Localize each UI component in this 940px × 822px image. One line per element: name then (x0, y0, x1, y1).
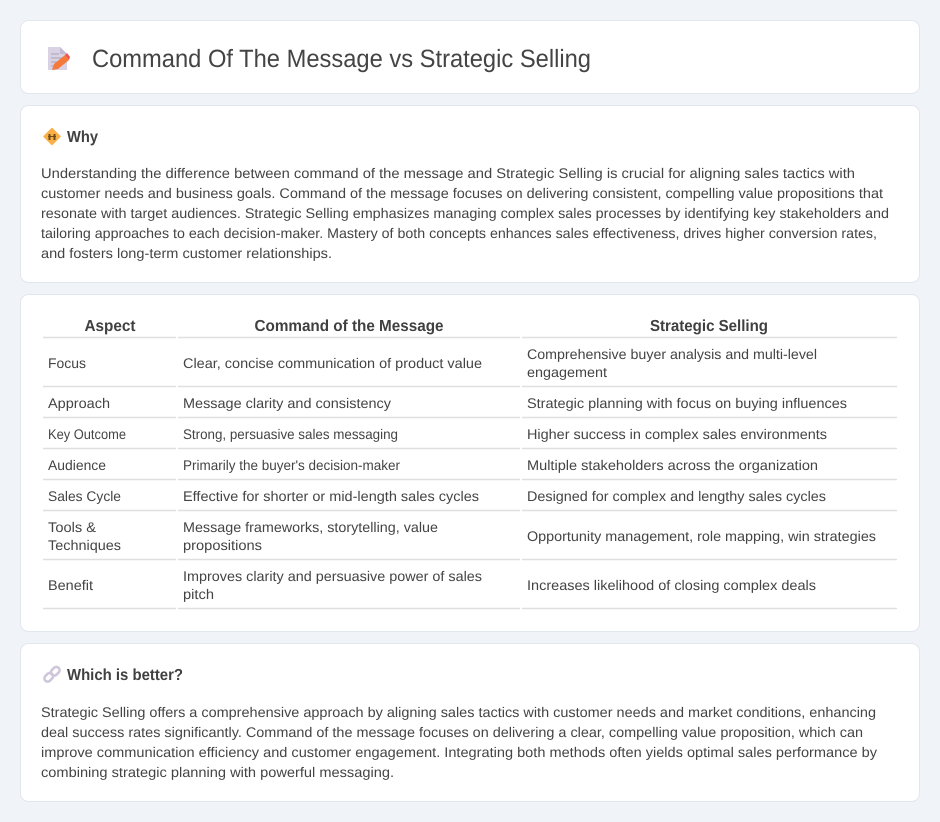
row: focus: Clear, concise communication of product value (183, 355, 482, 371)
text block: why paragraph: and fosters long-term customer relationships. (41, 245, 332, 261)
text block: which is better paragraph: combining strategic planning with powerful messaging. (41, 764, 394, 780)
row: audience (48, 457, 818, 473)
row: benefit (48, 568, 816, 602)
row: benefit: Benefit (48, 577, 93, 593)
text block: why paragraph: Understanding the difference between command of the message and Strategic Selling is crucial for aligning sales tactics with (41, 165, 855, 181)
row: key outcome: Strong, persuasive sales messaging (183, 426, 398, 442)
text block: why paragraph: customer needs and business goals. Command of the message focuses on delivering consistent, compelling value propositions that (41, 185, 883, 201)
table header: Aspect (84, 318, 136, 335)
row: sales cycle (48, 488, 826, 504)
row: tools and techniques: Tools & (48, 519, 97, 535)
table header: Strategic Selling (650, 318, 768, 335)
row: key outcome: Higher success in complex sales environments (527, 426, 827, 442)
row: key outcome (48, 426, 827, 442)
row: tools and techniques: propositions (183, 537, 262, 553)
row: tools and techniques (48, 519, 876, 553)
heading: which is better: Which is better? (67, 667, 183, 684)
icon: document with pencil (48, 47, 70, 70)
table header: Command of the Message (254, 318, 444, 335)
row: tools and techniques: Techniques (48, 537, 121, 553)
heading: why: Why (67, 129, 98, 146)
icon: warning diamond (44, 128, 60, 144)
row: focus: engagement (527, 364, 607, 380)
row: audience: Primarily the buyer's decision-maker (183, 457, 400, 473)
icon: chain link (43, 666, 61, 683)
row: audience: Multiple stakeholders across the organization (527, 457, 818, 473)
table header (84, 318, 768, 335)
text block: which is better paragraph (41, 704, 877, 780)
row: key outcome: Key Outcome (48, 426, 126, 442)
row: focus: Comprehensive buyer analysis and multi-level (527, 346, 817, 362)
row: sales cycle: Effective for shorter or mid-length sales cycles (183, 488, 479, 504)
text block: why paragraph: tailoring approaches to each decision-maker. Mastery of both concepts enhances sales effectiveness, drives higher conversion rates, (41, 225, 877, 241)
row: sales cycle: Sales Cycle (48, 488, 121, 504)
title: Command Of The Message vs Strategic Selling (92, 45, 591, 73)
panel: why (20, 106, 920, 282)
panel: title header (20, 20, 920, 94)
row: sales cycle: Designed for complex and lengthy sales cycles (527, 488, 826, 504)
row: approach: Approach (48, 395, 110, 411)
row: focus: Focus (48, 355, 86, 371)
text block: which is better paragraph: Strategic Selling offers a comprehensive approach by aligning sales tactics with customer needs and market conditions, enhancing (41, 704, 876, 720)
row: focus (48, 346, 817, 380)
row: tools and techniques: Message frameworks, storytelling, value (183, 519, 438, 535)
row: audience: Audience (48, 457, 106, 473)
row: benefit: Improves clarity and persuasive power of sales (183, 568, 482, 584)
panel: comparison table (20, 294, 920, 632)
text block: why paragraph (41, 165, 889, 261)
row: benefit: pitch (183, 586, 214, 602)
text block: which is better paragraph: deal success rates significantly. Command of the message focuses on delivering a clear, compelling value proposition, which can (41, 724, 863, 740)
row: approach: Strategic planning with focus on buying influences (527, 395, 847, 411)
row: approach (48, 395, 847, 411)
text block: which is better paragraph: improve communication efficiency and customer engagement. Integrating both methods often yields optimal sales performance by (41, 744, 877, 760)
row: approach: Message clarity and consistency (183, 395, 391, 411)
row: benefit: Increases likelihood of closing complex deals (527, 577, 816, 593)
row: tools and techniques: Opportunity management, role mapping, win strategies (527, 528, 876, 544)
text block: why paragraph: resonate with target audiences. Strategic Selling emphasizes managing complex sales processes by identifying key stakeholders and (41, 205, 889, 221)
panel: which is better (20, 644, 920, 802)
